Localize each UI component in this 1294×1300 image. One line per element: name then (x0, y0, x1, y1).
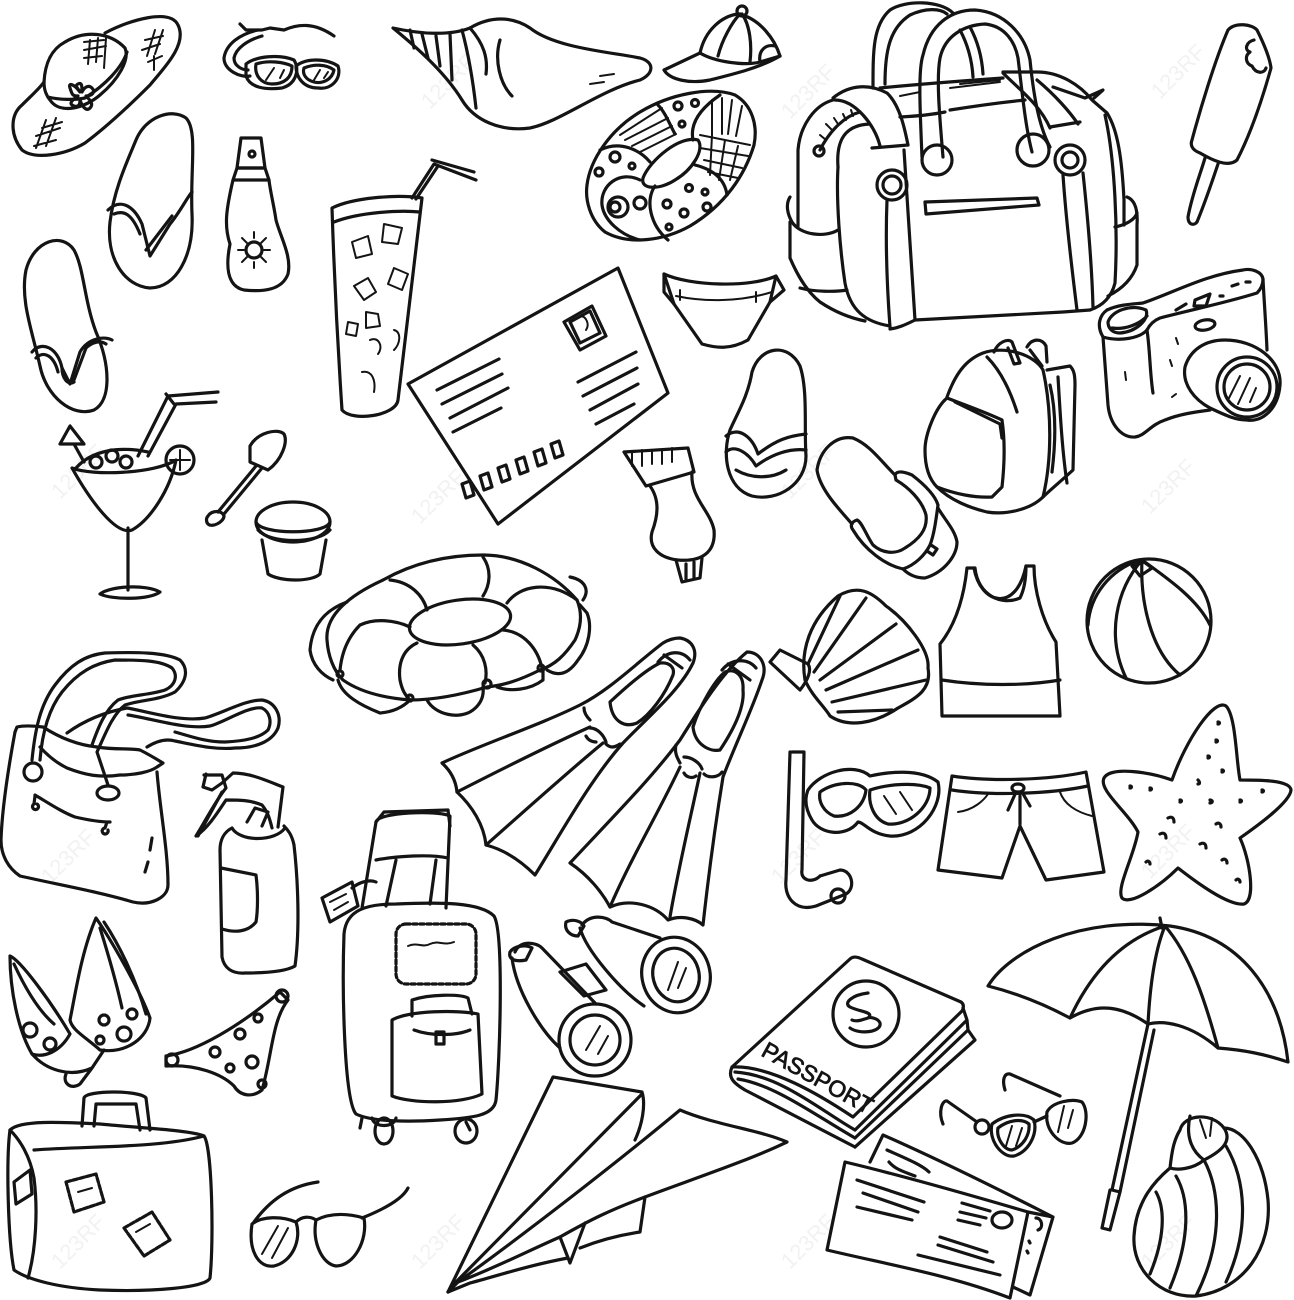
icon: swim briefs (664, 274, 784, 347)
icon: starfish (1103, 705, 1291, 904)
icon: tube of cream (624, 448, 714, 582)
icon: slipper 2 (817, 438, 957, 578)
icon: slipper 1 (726, 350, 806, 497)
icon: binoculars (510, 917, 719, 1076)
watermarks: 123RF (1146, 39, 1210, 104)
icon: scallop shell (770, 590, 929, 723)
icon: backpack (925, 340, 1075, 513)
icon: passport: PASSPORT (758, 1037, 878, 1119)
icon: tank top (940, 566, 1060, 716)
icon: board shorts (938, 772, 1104, 880)
icon: spiral sea shell (1134, 1116, 1268, 1296)
icon: swim fins (442, 638, 764, 925)
watermarks: 123RF (1136, 819, 1200, 884)
watermarks: 123RF (46, 439, 110, 504)
watermarks: 123RF (776, 1209, 840, 1274)
icon: flight tickets (827, 1135, 1053, 1298)
icon: ice cream bar (1188, 25, 1271, 224)
icon: spray bottle (196, 773, 298, 973)
icon: martini cocktail (60, 392, 218, 598)
icon: sand bucket (256, 502, 330, 580)
icon: bikini top (10, 918, 150, 1086)
icon: tote bag (1, 653, 279, 903)
icon: beach shovel (206, 431, 285, 525)
icon: dive mask and snorkel (786, 752, 939, 907)
icon: umbrella (988, 918, 1288, 1230)
icon: large duffel bag (787, 3, 1137, 329)
icon: travel suitcase with stickers (8, 1092, 212, 1290)
icon: beach ball (1087, 559, 1211, 683)
icon: small sunglasses (941, 1074, 1086, 1156)
icon: conch shell (393, 19, 651, 129)
watermarks: 123RF (36, 824, 100, 889)
icon: baseball cap (664, 6, 780, 82)
icon: tall iced drink (332, 160, 476, 416)
icon: swim goggles (224, 24, 339, 89)
watermarks: 123RF (1136, 454, 1200, 519)
icon: camera (1099, 269, 1280, 437)
watermarks: 123RF (776, 59, 840, 124)
icon: life ring (310, 555, 590, 715)
icon: rolling suitcase (322, 810, 500, 1144)
icon: sunscreen bottle (226, 138, 289, 291)
icon: paper airplane (448, 1077, 787, 1292)
watermarks: 123RF (406, 1209, 470, 1274)
icon: flip flop 1 (108, 114, 193, 288)
watermarks: 123RF (406, 464, 470, 529)
icon: bikini bottom (166, 990, 288, 1095)
icon: swim ring with patterns (587, 91, 755, 240)
icon: passport (730, 957, 975, 1147)
icon: sun hat (13, 17, 180, 155)
icon: flip flop 2 (24, 240, 112, 412)
watermarks: 123RF (46, 1209, 110, 1274)
icon: postcard (408, 268, 668, 524)
icon: sunglasses bottom (251, 1182, 408, 1266)
watermarks: 123RF (766, 824, 830, 889)
watermarks: 123RF (1136, 1209, 1200, 1274)
watermarks: 123RF (776, 439, 840, 504)
watermarks: 123RF (416, 49, 480, 114)
